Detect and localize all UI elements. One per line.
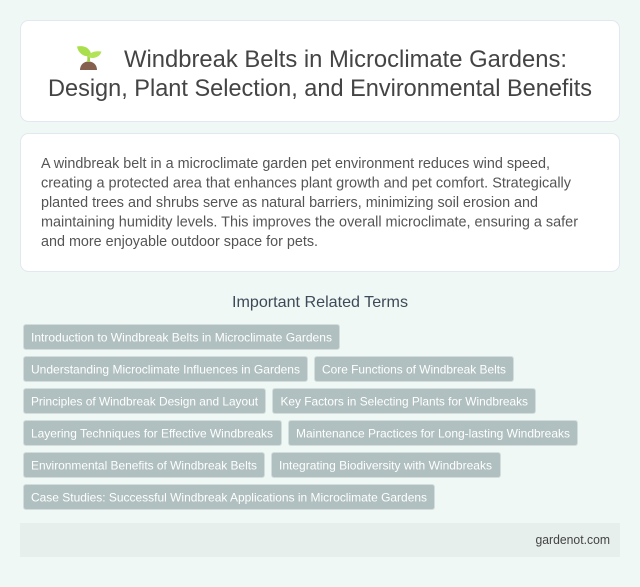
heading: important related terms: Important Related Terms (232, 294, 408, 311)
description text: creating a protected area that enhances plant growth and pet comfort. Strategically (41, 176, 572, 192)
tag: biodiversity (272, 452, 500, 478)
tag: environmental benefits (24, 452, 264, 478)
tag: layering techniques (24, 420, 282, 446)
tag: case studies: Case Studies: Successful Windbreak Applications in Microclimate Gardens (31, 490, 427, 504)
description text: and more enjoyable outdoor space for pets. (41, 234, 318, 250)
description text: A windbreak belt in a microclimate garden pet environment reduces wind speed, (41, 156, 550, 172)
tag: key factors (272, 388, 536, 414)
title (48, 46, 592, 102)
description text: planted trees and shrubs serve as natural barriers, minimizing soil erosion and (41, 195, 538, 211)
panel: related term tags (24, 324, 578, 510)
panel: description card (20, 134, 620, 272)
footer (20, 523, 620, 557)
tag: design principles (24, 388, 266, 414)
tag: design principles: Principles of Windbreak Design and Layout (31, 394, 259, 408)
tag: maintenance practices (288, 420, 578, 446)
description text (41, 156, 578, 250)
tag: introduction: Introduction to Windbreak Belts in Microclimate Gardens (31, 330, 332, 344)
tag: layering techniques: Layering Techniques for Effective Windbreaks (31, 426, 273, 440)
tag: core functions: Core Functions of Windbreak Belts (322, 362, 506, 376)
tag: understanding microclimate: Understanding Microclimate Influences in Gardens (31, 362, 300, 376)
tag: key factors: Key Factors in Selecting Plants for Windbreaks (280, 394, 528, 408)
tag: biodiversity: Integrating Biodiversity with Windbreaks (279, 458, 492, 472)
title: Windbreak Belts in Microclimate Gardens: (124, 46, 567, 73)
description text: maintaining humidity levels. This improves the overall microclimate, ensuring a safer (41, 214, 578, 230)
title: Design, Plant Selection, and Environmental Benefits (48, 75, 592, 102)
panel: title card (20, 20, 620, 122)
icon: sprout (77, 46, 102, 70)
tag: core functions (314, 356, 514, 382)
tag: understanding microclimate (24, 356, 308, 382)
tag: environmental benefits: Environmental Benefits of Windbreak Belts (31, 458, 257, 472)
tag: case studies (24, 484, 434, 510)
tag: introduction (24, 324, 340, 350)
footer: gardenot.com (536, 532, 610, 547)
tag: maintenance practices: Maintenance Practices for Long-lasting Windbreaks (296, 426, 570, 440)
